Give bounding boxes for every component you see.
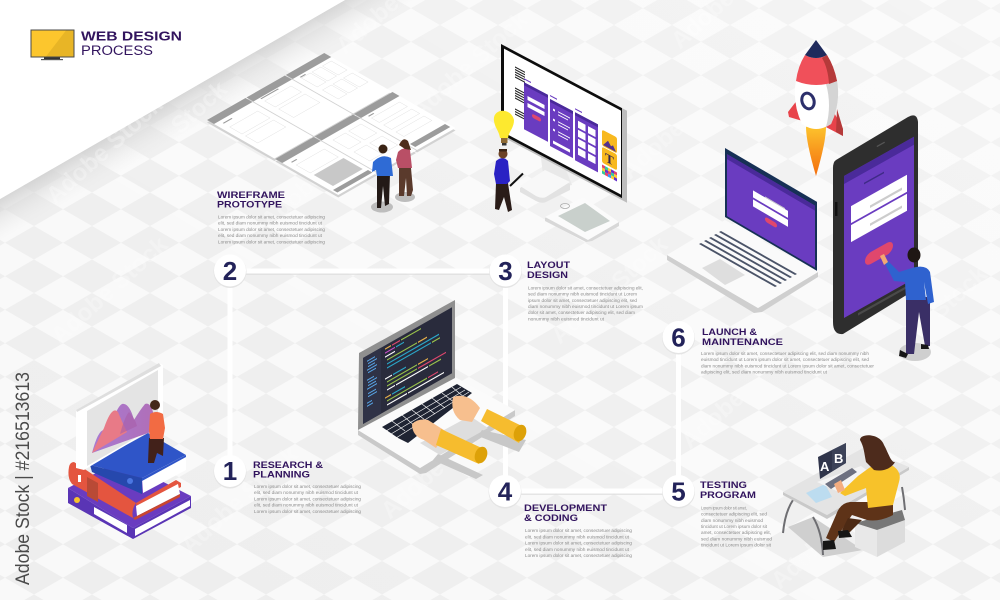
heading and text: testing program: consectetuer adipiscing elit, sed bbox=[701, 512, 767, 517]
heading and text: layout design: Lorem ipsum dolor sit amet, consectetuer adipiscing elit, bbox=[528, 286, 643, 290]
heading and text: development and coding: & CODING bbox=[524, 513, 578, 524]
heading and text: testing program: Lorem ipsum dolor sit amet, bbox=[701, 506, 747, 510]
heading and text: testing program: diam nonummy nibh euismod bbox=[701, 518, 763, 523]
figure: man pressing phone button bbox=[880, 248, 934, 361]
step 3: 3 bbox=[498, 256, 513, 286]
heading and text: layout design: diam nonummy nibh euismod tincidunt ut Lorem ipsum bbox=[528, 304, 643, 309]
icon: colour palette bbox=[602, 165, 617, 181]
illustration: launch laptop bbox=[667, 148, 818, 313]
icon: light bulb bbox=[494, 111, 514, 146]
heading and text: development and coding: Lorem ipsum dolor sit amet, consectetuer adipiscing bbox=[525, 528, 632, 533]
heading and text: wireframe prototype: Lorem ipsum dolor sit amet, consectetuer adipiscing bbox=[218, 214, 325, 220]
figure: designer with stylus bbox=[494, 149, 523, 212]
heading and text: layout design: ipsum dolor sit amet, consectetuer adipiscing elit, sed bbox=[528, 298, 637, 303]
step 4 bbox=[488, 475, 522, 508]
heading and text: research and planning bbox=[253, 460, 361, 514]
heading and text: testing program: TESTING bbox=[700, 480, 747, 491]
illustration: rocket bbox=[788, 40, 843, 176]
heading and text: development and coding: elit, sed diam nonummy nibh euismod tincidunt ut bbox=[525, 547, 630, 552]
step 6: 6 bbox=[671, 322, 686, 352]
step 6 bbox=[662, 321, 695, 354]
icon: text tile bbox=[602, 147, 617, 171]
heading and text: wireframe prototype: WIREFRAME bbox=[217, 190, 286, 201]
heading and text: testing program: tincidunt ut Lorem ipsum dolor sit bbox=[701, 542, 772, 547]
illustration: desktop monitor with layout screen bbox=[501, 44, 627, 203]
heading and text: development and coding bbox=[524, 503, 632, 558]
heading and text: launch and maintenance: euismod tincidunt ut Lorem ipsum dolor sit amet, consectetuer adipiscing elit, sed bbox=[701, 357, 869, 362]
illustration: smartphone with login screen bbox=[833, 115, 918, 334]
phone with area chart bbox=[76, 363, 163, 470]
heading and text: launch and maintenance: diam nonummy nibh euismod tincidunt ut Lorem ipsum dolor sit amet, consectetuer bbox=[701, 363, 874, 368]
watermarks: Adobe bbox=[676, 384, 750, 454]
watermarks: Adobe Stock bbox=[41, 91, 169, 209]
heading and text: layout design: nonummy nibh euismod tincidunt ut bbox=[528, 316, 605, 321]
heading and text: development and coding: Lorem ipsum dolor sit amet, consectetuer adipiscing bbox=[525, 541, 632, 546]
step 3 bbox=[489, 254, 522, 288]
icon: drawing tablet bbox=[545, 197, 619, 242]
heading and text: wireframe prototype: Lorem ipsum dolor sit amet, consectetuer adipiscing bbox=[218, 239, 325, 244]
heading and text: development and coding: DEVELOPMENT bbox=[524, 503, 607, 514]
heading and text: development and coding: Lorem ipsum dolor sit amet, consectetuer adipiscing bbox=[525, 553, 632, 558]
stool bbox=[855, 510, 905, 557]
stock id label: Adobe Stock | #216513613 bbox=[12, 372, 34, 585]
heading and text: launch and maintenance bbox=[701, 327, 874, 374]
heading and text: research and planning: Lorem ipsum dolor sit amet, consectetuer adipiscing bbox=[254, 509, 361, 514]
watermarks: Adobe Stock bbox=[406, 6, 534, 124]
title: WEB DESIGN bbox=[81, 29, 182, 44]
heading and text: wireframe prototype: PROTOTYPE bbox=[217, 200, 283, 210]
icon: text tile: T bbox=[605, 151, 615, 170]
heading and text: wireframe prototype: elit, sed diam nonummy nibh euismod tincidunt ut bbox=[218, 233, 323, 238]
header logo: yellow monitor icon bbox=[31, 30, 74, 60]
purple book bbox=[68, 460, 191, 539]
heading and text: layout design bbox=[527, 260, 643, 321]
heading and text: testing program: amet, consectetuer adipiscing elit, bbox=[701, 530, 771, 535]
heading and text: layout design: DESIGN bbox=[527, 270, 568, 281]
connector path linking the six steps bbox=[230, 271, 678, 492]
heading and text: wireframe prototype bbox=[217, 190, 325, 244]
heading and text: research and planning: RESEARCH & bbox=[253, 460, 323, 471]
illustration: wireframe sheets bbox=[207, 53, 456, 198]
heading and text: research and planning: elit, sed diam nonummy nibh euismod tincidunt ut bbox=[254, 490, 359, 495]
heading and text: development and coding: elit, sed diam nonummy nibh euismod tincidunt ut bbox=[525, 534, 630, 539]
title bbox=[81, 29, 182, 58]
watermarks: Adobe Stock bbox=[376, 406, 504, 524]
heading and text: launch and maintenance: MAINTENANCE bbox=[702, 337, 784, 348]
heading and text: research and planning: elit, sed diam nonummy nibh euismod tincidunt ut bbox=[254, 503, 359, 508]
heading and text: layout design: LAYOUT bbox=[527, 260, 570, 271]
step 5: 5 bbox=[671, 476, 686, 506]
watermarks: Adobe Stock bbox=[46, 231, 174, 349]
illustration: tester at desk: B bbox=[834, 451, 843, 466]
step markers 1 to 6 bbox=[214, 254, 695, 508]
step 2 bbox=[214, 254, 246, 288]
heading and text: research and planning: Lorem ipsum dolor sit amet, consectetuer adipiscing bbox=[254, 496, 361, 501]
heading and text: wireframe prototype: elit, sed diam nonummy nibh euismod tincidunt ut bbox=[218, 221, 323, 226]
illustration: stacked books with phone chart bbox=[68, 363, 191, 539]
illustration: tester at desk bbox=[783, 435, 909, 557]
heading and text: testing program: sed diam nonummy nibh euismod bbox=[701, 536, 772, 541]
heading and text: testing program: PROGRAM bbox=[700, 490, 756, 501]
red book bbox=[68, 462, 181, 520]
heading and text: layout design: sed diam nonummy nibh euismod tincidunt ut Lorem bbox=[528, 292, 637, 297]
heading and text: research and planning: PLANNING bbox=[253, 470, 310, 480]
illustration: coding laptop with hands bbox=[358, 300, 529, 479]
watermarks: Adobe Stock bbox=[546, 231, 674, 349]
icon: image tile bbox=[602, 130, 617, 153]
figures: man and woman viewing wireframes bbox=[371, 139, 415, 212]
step 4: 4 bbox=[498, 476, 513, 506]
watermarks: Adobe bbox=[616, 114, 690, 184]
heading and text: testing program: tincidunt ut Lorem ipsum dolor sit bbox=[701, 524, 768, 529]
watermarks: Adobe Stock bbox=[256, 116, 384, 234]
blue book bbox=[90, 433, 186, 494]
figure: man in orange bbox=[148, 400, 165, 463]
step 1 bbox=[214, 455, 246, 488]
title: PROCESS bbox=[81, 43, 153, 58]
step 1: 1 bbox=[223, 456, 237, 486]
heading and text: research and planning: Lorem ipsum dolor sit amet, consectetuer adipiscing bbox=[254, 484, 361, 489]
heading and text: launch and maintenance: Lorem ipsum dolor sit amet, consectetuer adipiscing elit, sed diam nonummy nibh bbox=[701, 351, 869, 356]
heading and text: layout design: dolor sit amet, consectetuer adipiscing elit, sed diam bbox=[528, 310, 635, 315]
watermarks: Stock bbox=[166, 75, 233, 139]
heading and text: testing program bbox=[700, 480, 772, 547]
illustration: tester at desk: A bbox=[820, 459, 830, 474]
heading and text: wireframe prototype: Lorem ipsum dolor sit amet, consectetuer adipiscing bbox=[218, 227, 325, 232]
heading and text: launch and maintenance: LAUNCH & bbox=[702, 327, 757, 338]
watermarks: Adobe Stock bbox=[766, 476, 894, 594]
watermarks: Adobe Stock bbox=[176, 441, 304, 559]
step 2: 2 bbox=[223, 256, 237, 286]
step 5 bbox=[662, 475, 695, 508]
heading and text: launch and maintenance: adipiscing elit, sed diam nonummy nibh euismod tincidunt ut bbox=[701, 370, 828, 374]
watermarks: Stock bbox=[926, 260, 993, 324]
